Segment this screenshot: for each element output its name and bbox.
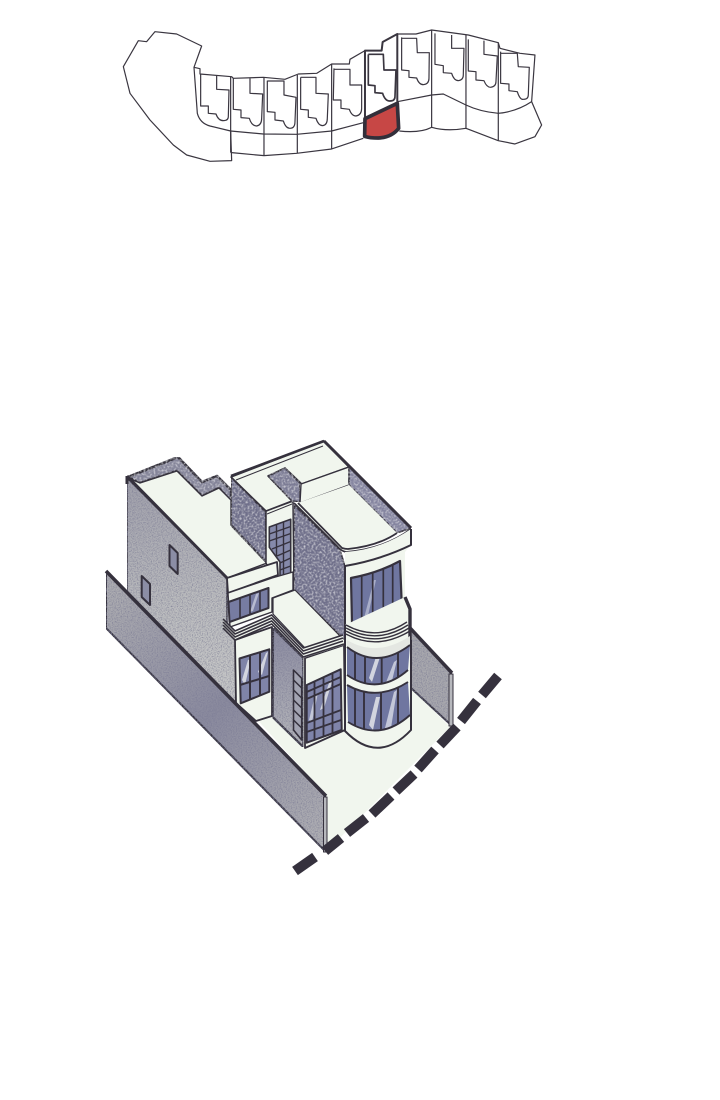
side window upper bbox=[170, 545, 178, 574]
upper block side wall bbox=[231, 477, 278, 563]
plan: corner park parcel bbox=[123, 32, 232, 161]
left volume parapet bbox=[128, 457, 231, 502]
plan: house footprints bbox=[201, 33, 529, 128]
site plan bbox=[123, 30, 542, 161]
upper step wall bbox=[300, 467, 349, 503]
lower front grid window bbox=[307, 669, 342, 743]
right boundary wall bbox=[410, 628, 453, 726]
lower front white wall with window bbox=[305, 645, 345, 748]
narrow side window bbox=[294, 670, 302, 740]
side window lower bbox=[142, 576, 150, 605]
upper bay glazing bbox=[352, 562, 400, 622]
left boundary wall bbox=[106, 571, 327, 852]
cylinder window lower bbox=[347, 683, 410, 730]
lower left white wall with window bbox=[235, 627, 272, 721]
upper bay wall with window bbox=[345, 529, 411, 632]
stair wall with grid window bbox=[266, 501, 294, 598]
plan: highlighted lot outline bbox=[365, 34, 397, 117]
plan: highlighted red plot bbox=[365, 103, 399, 138]
illustration: site plan and building bbox=[104, 29, 542, 876]
eave lines bbox=[223, 615, 344, 657]
mid level wall with window bbox=[228, 572, 293, 627]
balcony curved stripes bbox=[346, 622, 410, 642]
grid window bbox=[269, 519, 291, 576]
cylinder body bbox=[345, 597, 411, 748]
mid balcony slab bbox=[227, 562, 278, 593]
lower left window bbox=[240, 649, 269, 703]
ground slab bbox=[230, 640, 450, 852]
central dark wall bbox=[294, 505, 345, 640]
front roof edge bbox=[294, 503, 411, 552]
upper roof with light shaft bbox=[231, 441, 349, 514]
left volume side wall bbox=[127, 478, 236, 708]
terrace bbox=[273, 590, 340, 648]
lower mid gray wall bbox=[273, 628, 303, 747]
plan: lot dividers bbox=[231, 30, 498, 156]
dashed property line bbox=[295, 676, 498, 871]
front roof bbox=[295, 485, 397, 551]
cylinder bay bbox=[345, 597, 411, 748]
cylinder window middle bbox=[347, 646, 410, 684]
shadow band on balcony bbox=[347, 636, 410, 661]
balcony right edge bbox=[405, 597, 410, 645]
front roof parapet bbox=[324, 441, 411, 533]
stepped eave bands bbox=[223, 615, 344, 658]
eave band fill bbox=[223, 615, 344, 658]
light shaft bbox=[268, 468, 300, 502]
plan: sidewalk line bbox=[231, 94, 532, 134]
left volume roof bbox=[128, 471, 267, 578]
mid window bbox=[228, 588, 268, 622]
upper roof slab bbox=[231, 441, 349, 511]
plan: block outline bbox=[194, 30, 542, 144]
plan: street edge bbox=[232, 138, 363, 156]
building axonometric bbox=[106, 441, 498, 871]
plan: highlighted house bbox=[368, 54, 396, 101]
left roof edge line bbox=[127, 476, 227, 578]
cylinder outline bbox=[345, 625, 411, 748]
